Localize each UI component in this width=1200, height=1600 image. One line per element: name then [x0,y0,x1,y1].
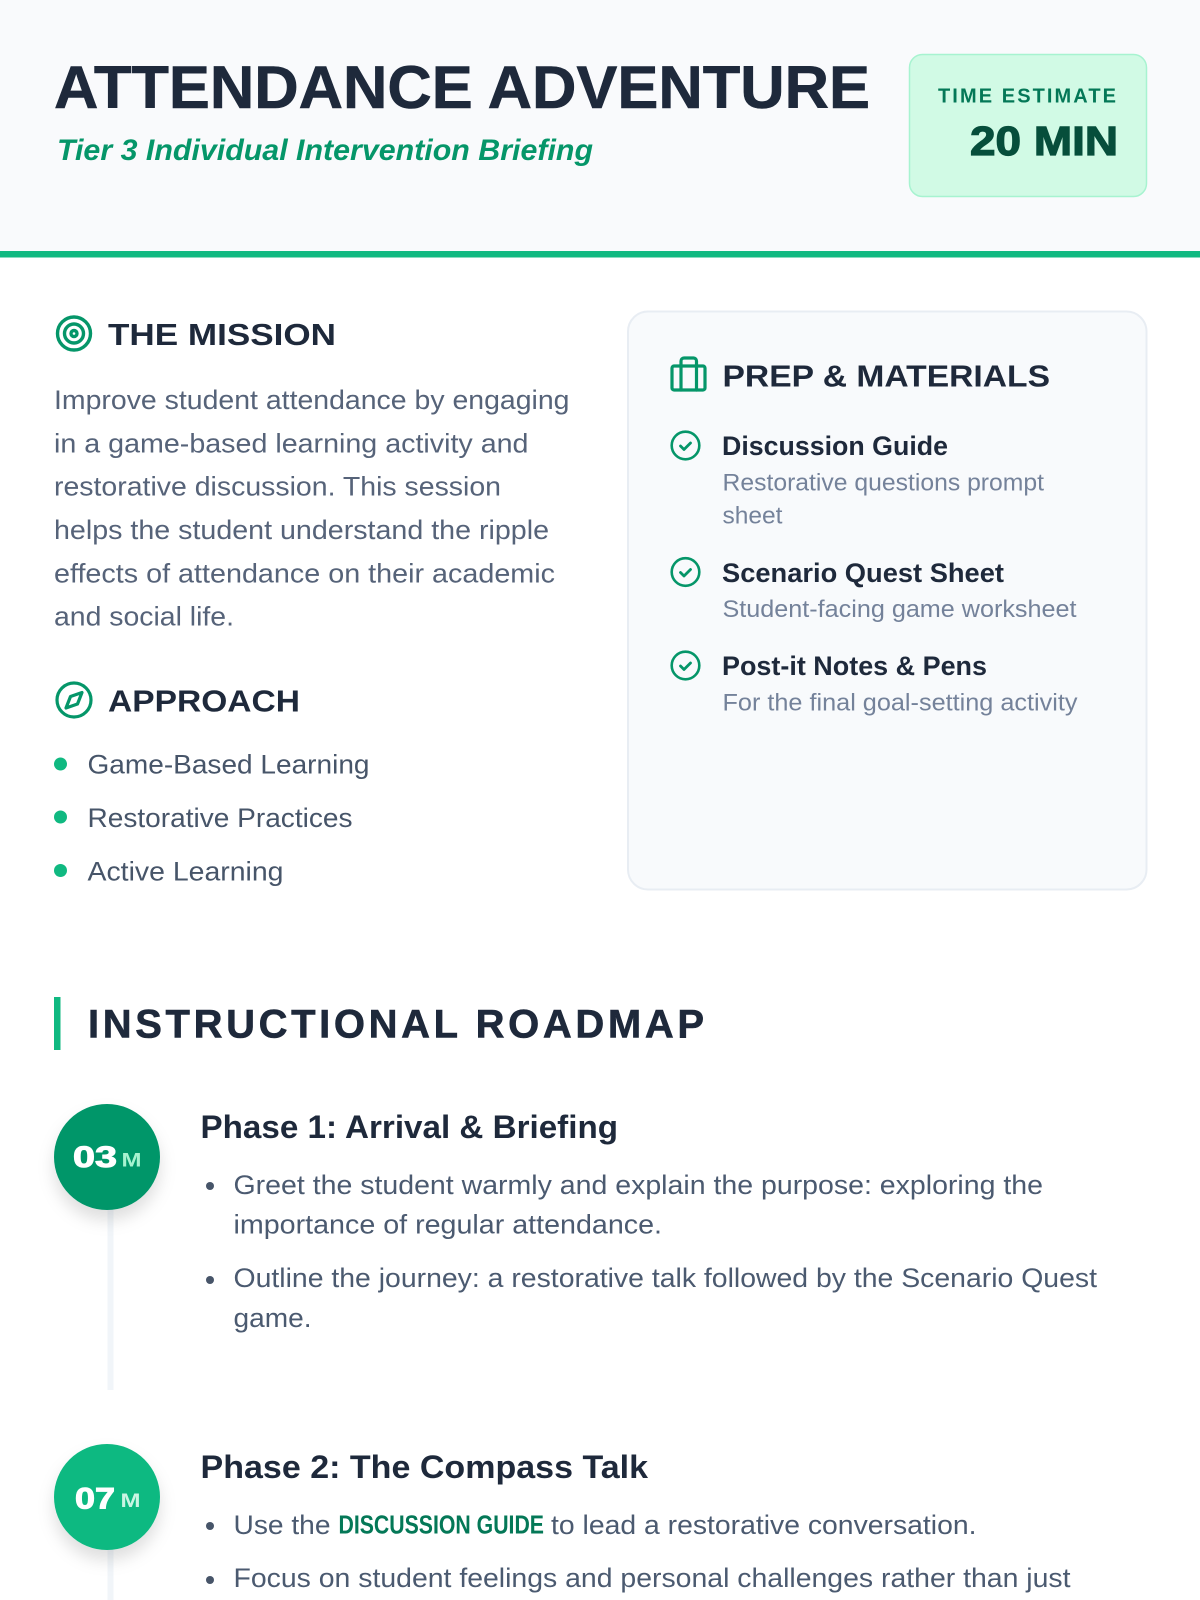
item: discussion guide: Discussion Guide [722,431,948,461]
subtitle: Tier 3 Individual Intervention Briefing [57,134,593,167]
mission text: restorative discussion. This session [54,472,501,502]
item: post-it notes and pens: For the final goal-setting activity [722,690,1078,716]
panel: the mission [54,317,570,632]
panel: approach [54,683,370,886]
phase 1 bullets: Greet the student warmly and explain the purpose: exploring the [234,1170,1043,1200]
phase 2 time badge: 07 [75,1482,115,1516]
item: discussion guide: Restorative questions prompt [722,470,1044,496]
mission heading: THE MISSION [108,317,336,352]
mission text [54,385,570,632]
icon: compass [57,683,91,717]
phase 2 time badge [54,1444,160,1550]
phase 1 time badge: M [122,1150,142,1172]
phase 2 bullets: to lead a restorative conversation. [551,1510,976,1540]
prep heading: PREP & MATERIALS [722,358,1050,394]
icon: briefcase [672,358,705,390]
phase 2 bullets: DISCUSSION GUIDE [338,1512,544,1540]
panel: prep and materials [628,312,1146,890]
phase 1 time badge: 03 [73,1141,117,1174]
phase 1 bullets: game. [234,1303,312,1333]
mission text: Improve student attendance by engaging [54,385,570,415]
mission text: and social life. [54,602,234,632]
phase 1 time badge [54,1104,160,1210]
phase 1 bullets: Outline the journey: a restorative talk followed by the Scenario Quest [234,1263,1098,1293]
item: scenario quest sheet: Student-facing game worksheet [722,596,1077,623]
mission text: in a game-based learning activity and [54,428,528,458]
roadmap heading: INSTRUCTIONAL ROADMAP [88,1002,704,1046]
item: post-it notes and pens: Post-it Notes & Pens [722,651,987,681]
timeline: phase 1 [54,1104,1098,1390]
phase 1 bullets [206,1170,1098,1333]
icon: target [58,317,90,350]
item: scenario quest sheet [672,558,1077,623]
approach list [54,750,370,886]
phase 2 title: Phase 2: The Compass Talk [200,1449,648,1485]
phase 1 bullets: importance of regular attendance. [234,1210,662,1240]
phase 2 bullets [206,1510,1071,1593]
item: scenario quest sheet: Scenario Quest Sheet [722,558,1004,588]
approach heading: APPROACH [108,684,300,718]
approach list: Restorative Practices [88,803,352,833]
timeline: phase 2 [54,1444,1071,1600]
phase 1 title: Phase 1: Arrival & Briefing [200,1109,618,1145]
approach list: Game-Based Learning [88,750,370,780]
phase 2 bullets: Use the [234,1510,330,1540]
phase 2 time badge: M [120,1491,140,1512]
phase 2 bullets: Focus on student feelings and personal challenges rather than just [234,1563,1071,1593]
item: discussion guide: sheet [722,502,783,530]
header [0,0,1200,258]
time estimate badge [910,54,1146,196]
mission text: effects of attendance on their academic [54,558,555,588]
time estimate badge: TIME ESTIMATE [938,86,1116,108]
time estimate badge: 20 MIN [970,118,1118,164]
item: discussion guide [672,431,1044,530]
approach list: Active Learning [88,856,284,886]
mission text: helps the student understand the ripple [54,515,549,545]
title: ATTENDANCE ADVENTURE [54,54,870,121]
item: post-it notes and pens [672,651,1078,716]
